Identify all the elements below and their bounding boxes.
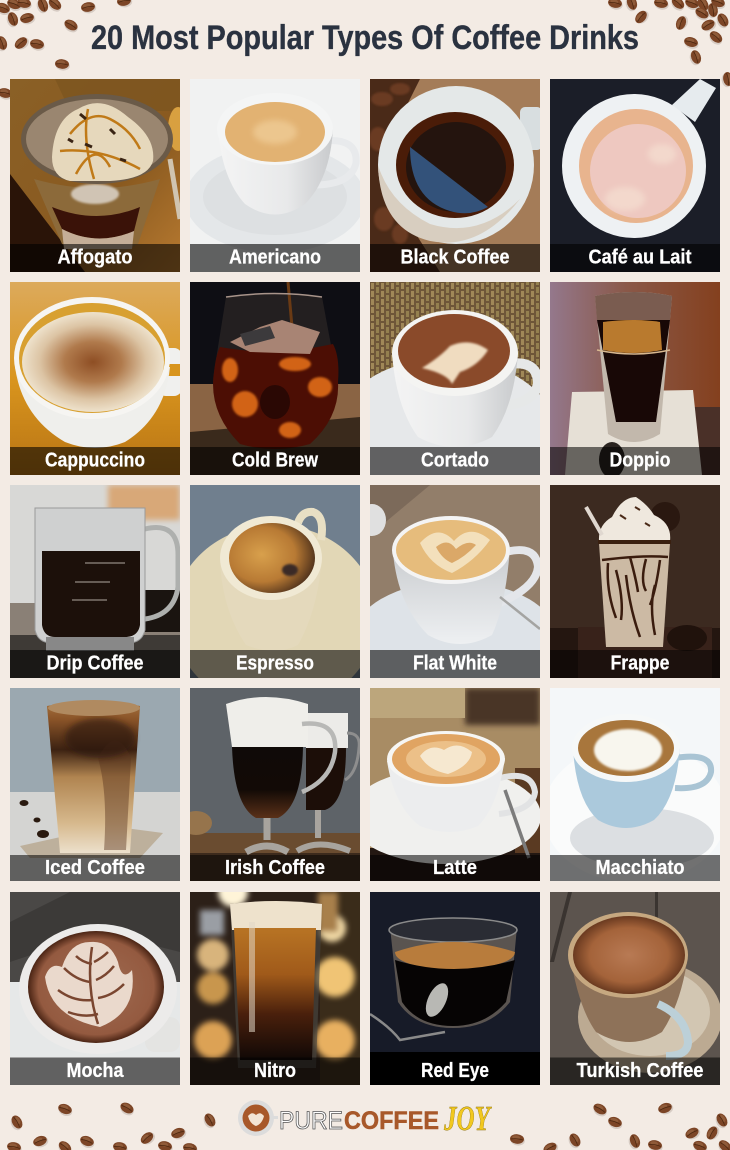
decoration: coffee beans bottom [6,1100,730,1150]
label: Doppio [610,450,670,472]
photo: cappuccino with cinnamon [10,282,182,475]
panel: Irish Coffee [180,688,360,881]
label: Latte [433,857,477,879]
panel: Cortado [370,282,540,475]
label band [550,447,720,475]
photo: macchiato in a pale blue cup [543,688,727,883]
label: Café au Lait [588,246,692,268]
panel: Affogato [10,79,188,272]
photo: black coffee in white cup [369,79,542,272]
label band [10,447,180,475]
panel: Iced Coffee [10,688,180,881]
photo: Turkish coffee on saucer [550,892,722,1085]
panel: Americano [185,79,365,272]
photo: mocha with fern latte art [10,892,180,1085]
logo: Pure Coffee Joy [238,1099,493,1138]
panel: Turkish Coffee [550,892,722,1085]
photo: flat white with latte art [350,485,560,705]
label band [550,855,720,881]
label: Cappuccino [45,450,145,472]
photo: top-down cup on dark surface [550,79,720,272]
icon: latte cup [238,1100,278,1136]
label band [190,855,360,881]
decoration: coffee beans top left [0,0,133,101]
label band [370,650,540,678]
photo: doppio shot glass on napkin [550,282,720,478]
photo: latte with art on a saucer [349,688,541,881]
label: Americano [229,246,321,268]
label: Espresso [236,652,314,674]
label band [10,1058,180,1085]
photo: affogato in a glass [10,79,188,272]
decoration: coffee beans top right [607,0,730,88]
wordmark: JOY: JOY [443,1099,493,1138]
photo: iced coffee in a tall glass [10,688,180,881]
photo: iced cold brew in a glass [190,282,360,475]
photo: white cup on saucer [190,79,360,244]
panel: Espresso [190,485,360,678]
photo: frappe with whipped cream and drizzle [550,485,720,678]
label band [190,447,360,475]
panel: Flat White [350,485,560,705]
label: Affogato [58,246,132,268]
label band [10,244,180,272]
panel: Red Eye [370,892,540,1085]
panel: Cold Brew [190,282,360,475]
wordmark: COFFEE: COFFEE [344,1107,439,1135]
label band [370,244,540,272]
label: Cold Brew [232,450,318,472]
label band [190,650,360,678]
photo: nitro coffee glass with bokeh background [190,877,360,1085]
label band [10,855,180,881]
panel: Latte [349,688,541,881]
panel: Cappuccino [10,282,182,475]
label: Mocha [66,1060,124,1082]
photo: red eye in dark glass [370,892,540,1085]
label: Flat White [413,652,497,674]
label: Cortado [421,450,489,472]
panel: Café au Lait [550,79,720,272]
title: 20 Most Popular Types Of Coffee Drinks [91,19,639,57]
photo: cortado cup on woven mat [370,282,540,447]
panel: Nitro [190,877,360,1085]
photo: espresso cup on cream saucer [190,485,360,678]
label: Nitro [254,1060,296,1082]
label: Black Coffee [400,246,510,268]
panel: Frappe [550,485,720,678]
label band [370,855,540,881]
label band [190,1058,360,1085]
wordmark: PURE: PURE [279,1107,343,1135]
label band [370,1052,540,1085]
label band [10,650,180,678]
label band [550,650,720,678]
label: Iced Coffee [45,857,145,879]
panel: Macchiato [543,688,727,883]
photo: Irish coffee glasses [180,688,360,881]
label: Turkish Coffee [576,1060,704,1082]
label band [190,244,360,272]
label: Frappe [610,652,670,674]
panel: Mocha [10,892,180,1085]
label band [550,1058,720,1085]
panel: Drip Coffee [10,485,180,678]
label: Irish Coffee [225,857,325,879]
panel: Black Coffee [369,79,542,272]
label band [370,447,540,475]
label: Drip Coffee [46,652,144,674]
label: Red Eye [421,1060,489,1082]
panel: Doppio [550,282,720,478]
photo: drip coffee glass mug [10,485,180,678]
label band [550,244,720,272]
label: Macchiato [596,857,684,879]
